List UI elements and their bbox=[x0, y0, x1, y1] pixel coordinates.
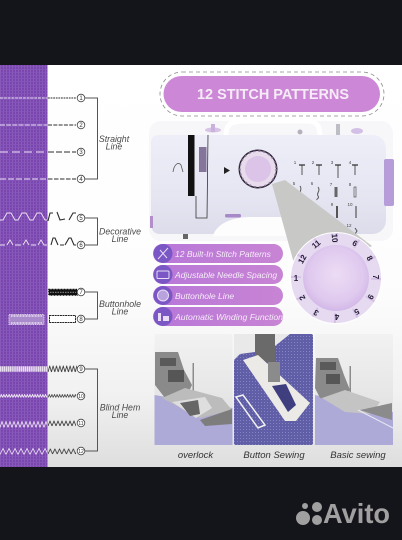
stitch pattern chart: 5 bbox=[293, 181, 296, 186]
heading banner: 12 stitch patterns: 12 STITCH PATTERNS bbox=[197, 87, 349, 103]
stitch pattern chart: 12 bbox=[346, 223, 352, 228]
numbered circles: 3 bbox=[79, 150, 83, 156]
feature list bbox=[153, 244, 283, 326]
numbered circles: 2 bbox=[79, 123, 83, 129]
photo: basic sewing bbox=[315, 334, 393, 445]
arrow marker bbox=[224, 167, 230, 174]
stitch pattern chart: 1 bbox=[294, 160, 297, 165]
watermark: Avito logo: Avito bbox=[323, 498, 390, 529]
caption: button sewing: Button Sewing bbox=[243, 450, 305, 461]
take-up outline bbox=[196, 135, 208, 218]
bracket: straight line bbox=[85, 98, 98, 179]
numbered circles bbox=[77, 94, 85, 455]
illustration: enlarged stitch dial: 10 bbox=[330, 233, 339, 243]
numbered circles: 12 bbox=[78, 449, 84, 455]
label: decorative line: Decorative bbox=[99, 226, 141, 236]
stitch pattern chart: 10 bbox=[347, 202, 353, 207]
needle bar bbox=[183, 234, 188, 239]
panel: purple fabric with stitches bbox=[0, 65, 48, 467]
label: blind hem line: Line bbox=[112, 410, 128, 420]
caption: overlock: overlock bbox=[178, 450, 214, 461]
photo: button sewing bbox=[234, 334, 313, 445]
bracket: decorative line bbox=[85, 218, 98, 245]
stitch pattern chart: 9 bbox=[331, 202, 334, 207]
illustration: enlarged stitch dial: 11 bbox=[310, 238, 323, 251]
bottom dark bar bbox=[0, 467, 402, 540]
numbered circles: 5 bbox=[79, 216, 83, 222]
stitch pattern chart: 6 bbox=[311, 181, 314, 186]
white content panel bbox=[0, 65, 402, 467]
label: straight line: Line bbox=[106, 142, 122, 152]
stitch pattern chart: 11 bbox=[329, 223, 334, 228]
numbered circles: 4 bbox=[79, 177, 83, 183]
label: decorative line: Line bbox=[112, 234, 128, 244]
illustration: enlarged stitch dial: 8 bbox=[365, 254, 375, 263]
illustration: enlarged stitch dial: 7 bbox=[371, 275, 380, 280]
label: straight line: Straight bbox=[99, 134, 130, 144]
numbered circles: 6 bbox=[79, 243, 83, 249]
stitch pattern chart: 7 bbox=[330, 182, 333, 187]
label: buttonhole line: Buttonhole bbox=[99, 299, 141, 309]
numbered circles: 9 bbox=[79, 367, 83, 373]
numbered circles: 8 bbox=[79, 317, 83, 323]
stitch guide lines bbox=[48, 98, 77, 322]
watermark: Avito logo bbox=[296, 498, 390, 529]
feature: buttonhole line: Buttonhole Line bbox=[175, 291, 234, 301]
illustration: enlarged stitch dial: 3 bbox=[312, 307, 320, 318]
small selector dial bbox=[238, 150, 278, 188]
illustration: enlarged stitch dial: 9 bbox=[365, 293, 376, 301]
top dark bar bbox=[0, 0, 402, 65]
stitch pattern chart: 2 bbox=[312, 160, 315, 165]
bracket: blind hem line bbox=[85, 369, 98, 451]
black thread slot bbox=[188, 135, 194, 196]
zoom wedge bbox=[272, 180, 372, 285]
hand wheel bbox=[384, 159, 394, 206]
photo: overlock bbox=[154, 334, 232, 445]
heading banner: 12 stitch patterns bbox=[160, 72, 384, 116]
illustration: enlarged stitch dial: 5 bbox=[352, 307, 361, 317]
feature: 12 built-in stitch patterns: 12 Built-In Stitch Patterns bbox=[175, 249, 272, 259]
feature: automatic winding function: Automatic Winding Function bbox=[174, 312, 283, 322]
feature: adjustable needle spacing: Adjustable Needle Spacing bbox=[174, 270, 277, 280]
illustration: enlarged stitch dial: 1 bbox=[294, 274, 299, 283]
zigzag guide stitches bbox=[48, 366, 77, 454]
label: buttonhole line: Line bbox=[112, 306, 128, 316]
left purple accent bbox=[150, 216, 153, 228]
numbered circles: 10 bbox=[78, 394, 84, 400]
top controls and spools bbox=[205, 121, 363, 136]
thread guide mark bbox=[173, 163, 183, 172]
purple accent bbox=[225, 214, 241, 218]
caption: basic sewing: Basic sewing bbox=[330, 450, 386, 461]
numbered circles: 1 bbox=[79, 96, 83, 102]
illustration: enlarged stitch dial: 4 bbox=[334, 312, 339, 321]
illustration: enlarged stitch dial bbox=[290, 232, 382, 324]
numbered circles: 11 bbox=[78, 421, 84, 427]
stitch pattern chart: 4 bbox=[349, 160, 352, 165]
stitch pattern chart bbox=[293, 160, 358, 237]
bracket: buttonhole line bbox=[85, 292, 98, 319]
label: blind hem line: Blind Hem bbox=[100, 402, 140, 412]
illustration: enlarged stitch dial: 2 bbox=[297, 293, 307, 302]
illustration: enlarged stitch dial: 6 bbox=[351, 238, 359, 249]
numbered circles: 7 bbox=[79, 290, 83, 296]
stitch length window bbox=[199, 147, 206, 172]
stitch pattern chart: 8 bbox=[349, 182, 352, 187]
illustration: enlarged stitch dial: 12 bbox=[296, 253, 309, 265]
white arch under the arm bbox=[213, 217, 302, 236]
stitch pattern chart: 3 bbox=[331, 160, 334, 165]
illustration: sewing machine bbox=[149, 121, 394, 241]
